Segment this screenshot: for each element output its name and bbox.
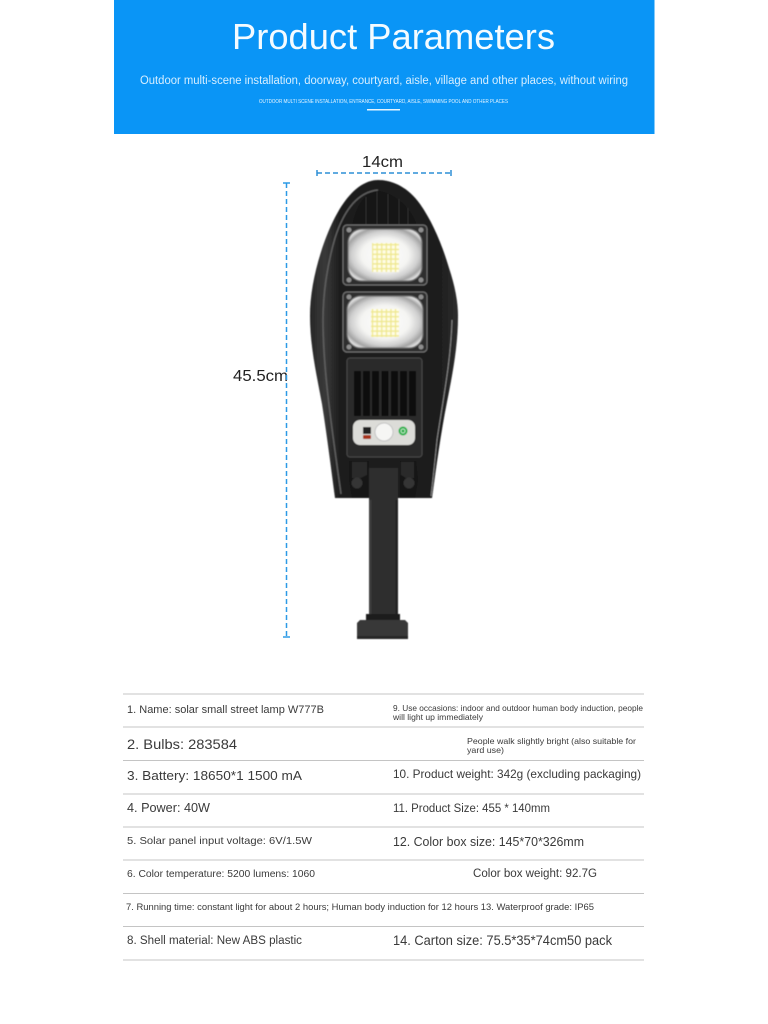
solar street lamp illustration xyxy=(310,180,458,639)
width dimension: 14cm: 14cm xyxy=(362,154,403,171)
height dimension: 45.5cm: 45.5cm xyxy=(233,368,288,385)
housing highlight edge xyxy=(323,190,378,494)
mounting brackets xyxy=(349,461,418,500)
sensor control panel xyxy=(353,420,415,445)
housing right rim xyxy=(431,320,452,496)
row 4 power: 4. Power: 40W xyxy=(127,800,211,815)
parameters table xyxy=(123,694,644,960)
row 3 battery: 3. Battery: 18650*1 1500 mA xyxy=(127,768,302,783)
spec 11 product size: 11. Product Size: 455 * 140mm xyxy=(393,803,550,815)
subtitle: Outdoor multi-scene installation, doorway, courtyard, aisle, village and other places, without wiring xyxy=(140,75,628,87)
spec 12 color box size: 12. Color box size: 145*70*326mm xyxy=(393,834,584,849)
spec 9 continued xyxy=(467,736,636,755)
color box weight: Color box weight: 92.7G xyxy=(473,868,597,880)
spec 9 continued: yard use) xyxy=(467,745,504,755)
spec 9 use occasions: 9. Use occasions: indoor and outdoor human body induction, people xyxy=(393,703,643,713)
width dimension: 14cm xyxy=(317,154,451,176)
row 6 color temperature: 6. Color temperature: 5200 lumens: 1060 xyxy=(127,869,315,880)
lamp pole and base xyxy=(357,465,408,639)
lamp housing xyxy=(310,180,458,498)
solar panel xyxy=(347,358,422,457)
row 5 solar panel voltage: 5. Solar panel input voltage: 6V/1.5W xyxy=(127,835,312,847)
title: Product Parameters xyxy=(232,16,555,57)
row 7 running time and waterproof grade: 7. Running time: constant light for about 2 hours; Human body induction for 12 hours 13. Waterproof grade: IP65 xyxy=(126,902,594,913)
row 1 name: 1. Name: solar small street lamp W777B xyxy=(127,704,324,716)
top cooling fins xyxy=(352,191,417,226)
spec 9 continued: People walk slightly bright (also suitable for xyxy=(467,736,636,746)
row 2 bulbs: 2. Bulbs: 283584 xyxy=(127,736,237,752)
header banner xyxy=(114,0,654,134)
row 8 shell material: 8. Shell material: New ABS plastic xyxy=(127,935,302,947)
small caption: OUTDOOR MULTI SCENE INSTALLATION, ENTRANCE, COURTYARD, AISLE, SWIMMING POOL AND OTHER PLACES xyxy=(259,99,508,105)
spec 9 use occasions: will light up immediately xyxy=(392,712,484,722)
LED module lower xyxy=(343,292,427,352)
spec 9 use occasions xyxy=(392,703,643,722)
spec 10 product weight: 10. Product weight: 342g (excluding packaging) xyxy=(393,767,641,781)
LED module upper xyxy=(343,225,427,285)
spec 14 carton size: 14. Carton size: 75.5*35*74cm50 pack xyxy=(393,933,612,948)
